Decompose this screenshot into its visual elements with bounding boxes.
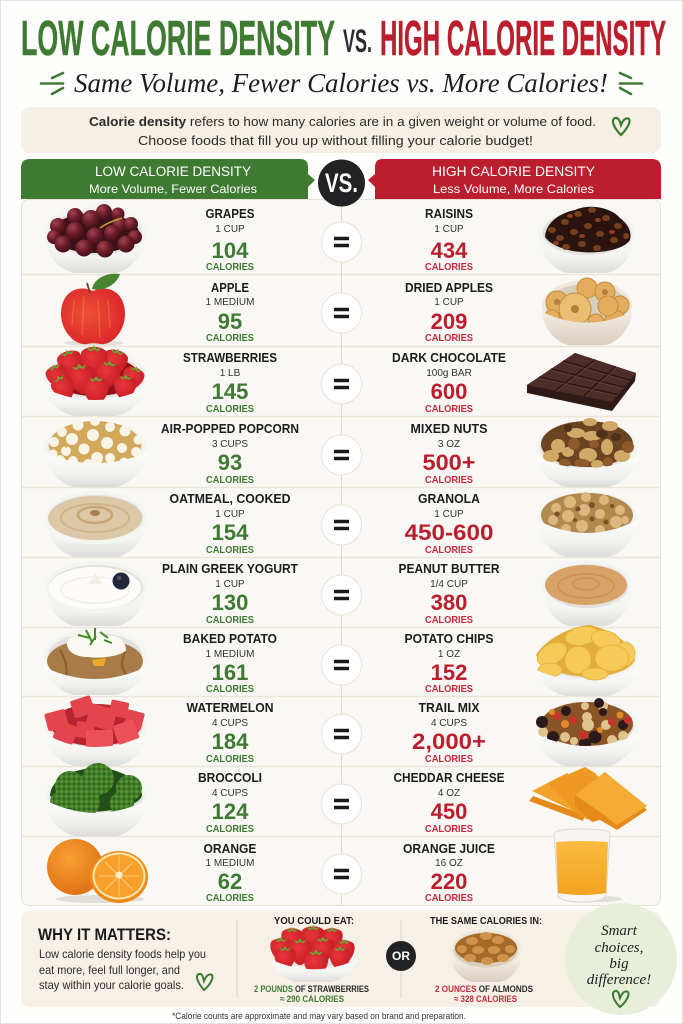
label: orange xyxy=(204,842,256,904)
label: granola xyxy=(404,492,494,556)
label: dark chocolate: 100g BAR xyxy=(426,368,472,379)
label: trail mix: 4 CUPS xyxy=(431,718,467,729)
label: potato chips: CALORIES xyxy=(425,684,473,695)
callout: smart choices: choices, xyxy=(595,940,643,956)
icon: orange xyxy=(47,839,148,903)
heading: why it matters: WHY IT MATTERS: xyxy=(38,925,171,944)
footnote: *Calorie counts are approximate and may vary based on brand and preparation. xyxy=(172,1011,466,1022)
label: strawberries xyxy=(183,351,277,415)
label: trail mix xyxy=(412,701,486,765)
label: cheddar cheese: CHEDDAR CHEESE xyxy=(394,771,504,785)
label: mixed nuts: 3 OZ xyxy=(438,439,460,450)
text: why it matters body xyxy=(39,947,206,992)
label: strawberries: 1 LB xyxy=(220,368,241,379)
label: potato chips xyxy=(404,632,494,695)
row: strawberries vs dark chocolate xyxy=(43,345,636,416)
text: why it matters body: Low calorie density foods help you xyxy=(39,947,206,961)
row: baked potato vs potato chips xyxy=(44,624,638,696)
icon: orange juice glass xyxy=(554,829,622,902)
vs badge xyxy=(318,160,365,206)
callout: smart choices: Smart xyxy=(601,923,638,939)
equals sign xyxy=(322,784,362,824)
label: strawberries: STRAWBERRIES xyxy=(183,351,277,365)
icon: granola xyxy=(537,491,637,557)
label: apple: APPLE xyxy=(211,281,249,295)
label: greek yogurt: CALORIES xyxy=(206,615,254,626)
icon: potato chips xyxy=(533,624,638,696)
left header: low calorie density: More Volume, Fewer Calories xyxy=(89,182,257,196)
equals sign xyxy=(322,364,362,404)
label: dried apples xyxy=(405,281,493,344)
label: raisins: CALORIES xyxy=(425,262,473,273)
equals sign xyxy=(322,854,362,894)
right header: high calorie density: Less Volume, More Calories xyxy=(433,182,594,196)
intro panel: Choose foods that fill you up without filling your calorie budget! xyxy=(138,133,533,148)
icon: bowl of almonds xyxy=(451,929,521,982)
equals sign xyxy=(322,505,362,545)
icon: watermelon xyxy=(44,695,147,766)
row: orange vs orange juice xyxy=(47,829,622,904)
equals sign xyxy=(322,714,362,754)
label: orange juice xyxy=(403,842,495,904)
label: dried apples: DRIED APPLES xyxy=(405,281,493,295)
row: watermelon vs trail mix xyxy=(44,695,638,766)
label: raisins: 1 CUP xyxy=(434,224,464,235)
label: mixed nuts: 500+ xyxy=(422,450,476,475)
callout: smart choices: big xyxy=(609,956,629,972)
caption: almonds: ≈ 328 CALORIES xyxy=(454,994,517,1005)
row: yogurt vs peanut butter xyxy=(45,560,632,626)
icon: small heart xyxy=(197,974,213,990)
label: granola: 1 CUP xyxy=(434,509,464,520)
vs badge: VS. xyxy=(325,168,358,198)
label: apple xyxy=(206,281,254,344)
caption: strawberries xyxy=(254,984,369,1005)
label: mixed nuts: CALORIES xyxy=(425,475,473,486)
icon: broccoli xyxy=(45,763,147,836)
label: peanut butter: PEANUT BUTTER xyxy=(398,562,500,576)
label: dark chocolate: DARK CHOCOLATE xyxy=(392,351,506,365)
label: broccoli: CALORIES xyxy=(206,824,254,835)
icon: bowl of strawberries xyxy=(270,925,357,982)
label: popcorn: 93 xyxy=(218,450,242,475)
label: peanut butter: 380 xyxy=(431,590,467,615)
caption: almonds xyxy=(435,984,533,1005)
label: dark chocolate: CALORIES xyxy=(425,404,473,415)
right header: high calorie density xyxy=(368,159,661,199)
label: watermelon xyxy=(186,701,274,765)
label: greek yogurt: 130 xyxy=(212,590,248,615)
label: oatmeal: CALORIES xyxy=(206,545,254,556)
label: strawberries: CALORIES xyxy=(206,404,254,415)
icon: trail mix xyxy=(536,698,638,766)
label: popcorn: CALORIES xyxy=(206,475,254,486)
caption: strawberries: ≈ 290 CALORIES xyxy=(280,994,344,1005)
label: peanut butter: CALORIES xyxy=(425,615,473,626)
label: baked potato xyxy=(183,632,277,695)
equals sign xyxy=(322,222,362,262)
icon: oatmeal xyxy=(45,491,147,557)
label: raisins: RAISINS xyxy=(425,207,473,221)
icon: dark chocolate xyxy=(527,353,636,411)
icon: dried apples xyxy=(542,278,632,345)
label: broccoli xyxy=(198,771,262,835)
label: grapes: 1 CUP xyxy=(215,224,245,235)
label: orange: 62 xyxy=(218,869,242,894)
label: grapes: CALORIES xyxy=(206,262,254,273)
icon: grapes xyxy=(44,204,146,273)
heading: you could eat: YOU COULD EAT: xyxy=(274,915,354,927)
label: oatmeal: 154 xyxy=(212,520,249,545)
label: orange: ORANGE xyxy=(204,842,256,856)
label: broccoli: 4 CUPS xyxy=(212,788,248,799)
label: orange juice: 16 OZ xyxy=(435,858,463,869)
label: granola: CALORIES xyxy=(425,545,473,556)
right header: high calorie density: HIGH CALORIE DENSITY xyxy=(432,164,595,179)
heading: the same calories in: THE SAME CALORIES IN: xyxy=(430,915,542,927)
label: peanut butter xyxy=(398,562,500,626)
label: baked potato: CALORIES xyxy=(206,684,254,695)
label: cheddar cheese: 4 OZ xyxy=(438,788,460,799)
label: raisins: 434 xyxy=(431,238,468,263)
icon: peanut butter xyxy=(542,560,632,626)
intro panel xyxy=(21,107,661,153)
row: popcorn vs mixed nuts xyxy=(44,416,638,487)
label: grapes: GRAPES xyxy=(206,207,254,221)
label: broccoli: 124 xyxy=(212,799,249,824)
label: popcorn: AIR-POPPED POPCORN xyxy=(161,422,299,436)
label: apple: 95 xyxy=(218,309,242,334)
label: potato chips: 1 OZ xyxy=(438,649,460,660)
label: watermelon: 4 CUPS xyxy=(212,718,248,729)
icon: baked potato xyxy=(44,628,146,695)
text: why it matters body: stay within your calorie goals. xyxy=(39,978,184,992)
label: mixed nuts xyxy=(410,422,488,486)
label: orange juice: 220 xyxy=(431,869,467,894)
label: granola: GRANOLA xyxy=(418,492,480,506)
icon: air-popped popcorn xyxy=(44,416,146,487)
label: grapes xyxy=(206,207,254,273)
panel: why it matters xyxy=(21,911,661,1007)
label: raisins xyxy=(425,207,473,273)
label: cheddar cheese: 450 xyxy=(431,799,467,824)
label: potato chips: 152 xyxy=(431,660,467,685)
table panel xyxy=(22,200,660,906)
label: greek yogurt: PLAIN GREEK YOGURT xyxy=(162,562,298,576)
equals sign xyxy=(322,645,362,685)
icon: plain greek yogurt xyxy=(45,561,147,626)
label: dried apples: 209 xyxy=(431,309,467,334)
label: oatmeal: OATMEAL, COOKED xyxy=(170,492,290,506)
caption: strawberries: 2 POUNDS OF STRAWBERRIES xyxy=(254,984,369,995)
label: greek yogurt: 1 CUP xyxy=(215,579,245,590)
left header: low calorie density xyxy=(21,159,315,199)
title: VS. xyxy=(343,23,372,59)
equals sign xyxy=(322,435,362,475)
label: orange: 1 MEDIUM xyxy=(206,858,254,869)
label: dried apples: 1 CUP xyxy=(434,297,464,308)
caption: almonds: 2 OUNCES OF ALMONDS xyxy=(435,984,533,995)
icon: mixed nuts xyxy=(536,418,638,487)
label: dark chocolate xyxy=(392,351,506,415)
callout: smart choices xyxy=(565,903,677,1015)
label: watermelon: 184 xyxy=(212,729,249,754)
label: greek yogurt xyxy=(162,562,298,626)
row: oatmeal vs granola xyxy=(45,491,637,557)
callout: smart choices: difference! xyxy=(587,972,651,988)
label: oatmeal xyxy=(170,492,290,556)
label: oatmeal: 1 CUP xyxy=(215,509,245,520)
label: potato chips: POTATO CHIPS xyxy=(404,632,494,646)
label: trail mix: 2,000+ xyxy=(412,729,486,754)
label: trail mix: TRAIL MIX xyxy=(418,701,480,715)
equals sign xyxy=(322,293,362,333)
icon: cheddar cheese xyxy=(529,767,647,830)
label: mixed nuts: MIXED NUTS xyxy=(410,422,488,436)
text: why it matters body: eat more, feel full longer, and xyxy=(39,963,180,977)
icon: raisins xyxy=(539,207,635,273)
icon: apple xyxy=(61,274,125,346)
row: grapes vs raisins xyxy=(44,204,635,273)
intro panel: Calorie density refers to how many calories are in a given weight or volume of food. xyxy=(89,114,596,129)
label: dark chocolate: 600 xyxy=(431,379,467,404)
label: orange juice: CALORIES xyxy=(425,893,473,904)
badge: or xyxy=(386,941,416,971)
row: broccoli vs cheddar cheese xyxy=(45,763,647,836)
label: trail mix: CALORIES xyxy=(425,754,473,765)
label: baked potato: 161 xyxy=(212,660,248,685)
label: cheddar cheese: CALORIES xyxy=(425,824,473,835)
badge: or: OR xyxy=(392,949,410,963)
label: baked potato: 1 MEDIUM xyxy=(206,649,254,660)
label: cheddar cheese xyxy=(394,771,504,835)
label: orange: CALORIES xyxy=(206,893,254,904)
label: grapes: 104 xyxy=(212,238,249,263)
label: watermelon: WATERMELON xyxy=(186,701,274,715)
subtitle: Same Volume, Fewer Calories vs. More Calories! xyxy=(74,68,608,98)
label: dried apples: CALORIES xyxy=(425,333,473,344)
label: peanut butter: 1/4 CUP xyxy=(430,579,468,590)
label: popcorn xyxy=(161,422,299,486)
label: orange juice: ORANGE JUICE xyxy=(403,842,495,856)
left header: low calorie density: LOW CALORIE DENSITY xyxy=(95,164,251,179)
label: broccoli: BROCCOLI xyxy=(198,771,262,785)
label: granola: 450-600 xyxy=(404,520,494,545)
label: popcorn: 3 CUPS xyxy=(212,439,248,450)
title: LOW CALORIE DENSITY xyxy=(21,12,335,66)
row: apple vs dried apples xyxy=(61,274,632,346)
label: apple: CALORIES xyxy=(206,333,254,344)
equals sign xyxy=(322,575,362,615)
label: strawberries: 145 xyxy=(212,379,248,404)
label: watermelon: CALORIES xyxy=(206,754,254,765)
icon: strawberries xyxy=(43,345,147,416)
label: apple: 1 MEDIUM xyxy=(206,297,254,308)
label: baked potato: BAKED POTATO xyxy=(183,632,277,646)
